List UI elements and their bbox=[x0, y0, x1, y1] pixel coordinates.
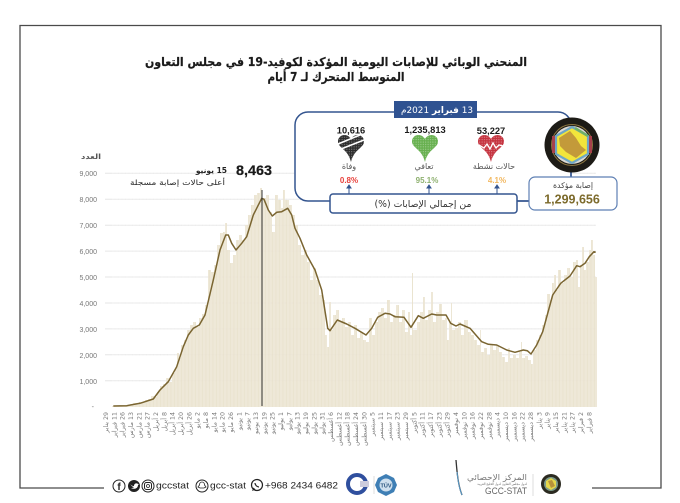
x axis date labels: 27 يناير bbox=[570, 412, 577, 434]
y axis gridlines and labels: 5,000 bbox=[79, 275, 97, 282]
x axis date labels: 10 ديسمبر bbox=[503, 412, 510, 442]
x axis date labels: 7 يونيو bbox=[245, 412, 252, 431]
stat: deaths: 10,616 bbox=[337, 126, 365, 136]
footer: social media contacts: gccstat bbox=[156, 480, 189, 492]
y axis gridlines and labels: 9,000 bbox=[79, 171, 97, 178]
peak marker line bbox=[261, 190, 263, 406]
callout: highest recorded cases: 8,463 bbox=[236, 162, 272, 178]
callout: highest recorded cases: أعلى حالات إصابة مسجلة bbox=[130, 177, 225, 187]
logo: quality certification bbox=[348, 474, 397, 496]
chart: daily cases bars bbox=[112, 170, 597, 407]
icon: small GCC emblem bbox=[541, 474, 561, 494]
footer: social media contacts: +968 2434 6482 bbox=[265, 480, 338, 492]
logo: GCC-STAT: لدول مجلس التعاون لدول الخليج العربية bbox=[477, 482, 527, 486]
x axis date labels: 16 نوفمبر bbox=[470, 412, 477, 440]
x axis date labels: 31 يوليو bbox=[320, 412, 327, 435]
x axis date labels: 11 فبراير bbox=[111, 412, 118, 438]
title: المتوسط المتحرك لـ 7 أيام bbox=[268, 69, 404, 85]
y axis gridlines and labels: 4,000 bbox=[79, 301, 97, 308]
x axis date labels: 1 يوليو bbox=[278, 412, 285, 431]
x axis date labels: 13 يونيو bbox=[253, 412, 260, 435]
x axis date labels: 18 أغسطس bbox=[343, 412, 352, 446]
x axis date labels: 28 نوفمبر bbox=[486, 412, 493, 440]
x axis date labels: 16 ديسمبر bbox=[511, 412, 518, 442]
icon: GCC emblem bbox=[544, 118, 600, 172]
connector bbox=[517, 171, 571, 201]
stat: active: 4.1% bbox=[488, 176, 506, 185]
stat: recovered: تعافي bbox=[414, 162, 434, 171]
icon: twitter bbox=[128, 480, 140, 492]
x axis date labels: 20 أبريل bbox=[176, 412, 185, 436]
x axis date labels: 5 أكتوبر bbox=[409, 412, 418, 434]
x axis date labels: 4 ديسمبر bbox=[495, 412, 502, 438]
stat: recovered bbox=[404, 125, 446, 185]
x axis date labels: 14 مايو bbox=[211, 412, 218, 433]
x axis date labels: 9 يناير bbox=[545, 412, 552, 430]
x axis date labels: 21 مارس bbox=[136, 412, 143, 438]
x axis date labels: 8 أبريل bbox=[159, 412, 168, 432]
x axis date labels: 19 يونيو bbox=[261, 412, 268, 435]
x axis date labels: 25 يونيو bbox=[270, 412, 277, 435]
x axis date labels: 2 مايو bbox=[195, 412, 202, 429]
x axis date labels: 29 سبتمبر bbox=[403, 412, 410, 441]
x axis date labels: 29 أكتوبر bbox=[443, 412, 452, 438]
x axis date labels: 23 سبتمبر bbox=[395, 412, 402, 441]
arrows to percentages bbox=[347, 185, 499, 194]
x axis date labels: 30 أغسطس bbox=[359, 412, 368, 446]
x axis date labels: 5 سبتمبر bbox=[370, 412, 377, 437]
x axis date labels: 11 أكتوبر bbox=[418, 412, 427, 438]
logo: GCC-STAT bbox=[456, 460, 561, 496]
x axis date labels: 20 مايو bbox=[220, 412, 227, 433]
x axis date labels: 2 فبراير bbox=[578, 412, 585, 434]
icon: facebook bbox=[113, 480, 125, 493]
footer: social media contacts bbox=[113, 480, 338, 493]
icon: snapchat bbox=[196, 480, 208, 492]
x axis date labels: 27 مارس bbox=[145, 412, 152, 438]
logo: GCC-STAT: المركز الإحصائي bbox=[467, 473, 527, 483]
stat: deaths: وفاة bbox=[342, 162, 356, 171]
stat: active: حالات نشطة bbox=[473, 162, 515, 171]
y axis gridlines and labels bbox=[79, 153, 596, 411]
y axis gridlines and labels: 1,000 bbox=[79, 379, 97, 386]
x axis date labels: 23 أكتوبر bbox=[434, 412, 443, 438]
x axis date labels: 22 نوفمبر bbox=[478, 412, 485, 440]
x axis date labels: 3 يناير bbox=[536, 412, 543, 430]
logo: quality certification: TÜV bbox=[380, 482, 392, 490]
box: share of total: من إجمالي الإصابات (%) bbox=[375, 199, 471, 210]
x axis date labels: 19 يوليو bbox=[303, 412, 310, 435]
box: confirmed cases bbox=[529, 177, 617, 210]
title bbox=[145, 55, 527, 85]
y axis gridlines and labels: 8,000 bbox=[79, 197, 97, 204]
stat: recovered: 1,235,813 bbox=[404, 125, 446, 135]
x axis date labels: 13 يوليو bbox=[295, 412, 302, 435]
x axis date labels: 8 مايو bbox=[203, 412, 210, 429]
stat: recovered: 95.1% bbox=[416, 176, 438, 185]
icon: whatsapp bbox=[252, 480, 262, 491]
x axis date labels: 17 أكتوبر bbox=[426, 412, 435, 438]
box: share of total bbox=[330, 194, 517, 213]
y axis gridlines and labels: 3,000 bbox=[79, 327, 97, 334]
stat: deaths: 0.8% bbox=[340, 176, 358, 185]
x axis date labels: 15 يناير bbox=[553, 412, 560, 434]
stat: deaths bbox=[337, 126, 365, 185]
icon: facebook: f bbox=[117, 482, 121, 493]
chart: 7-day moving average curve bbox=[113, 198, 596, 406]
x axis date labels: 17 سبتمبر bbox=[386, 412, 393, 441]
x axis date labels: 7 يوليو bbox=[286, 412, 293, 431]
y axis gridlines and labels: 6,000 bbox=[79, 249, 97, 256]
date badge: 13 فبراير 2021م bbox=[401, 106, 473, 116]
callout: highest recorded cases bbox=[130, 162, 272, 187]
title: المنحني الوبائي للإصابات اليومية المؤكدة لكوفيد-19 في مجلس التعاون bbox=[145, 55, 527, 70]
y axis gridlines and labels: 7,000 bbox=[79, 223, 97, 230]
x axis date labels: 25 يوليو bbox=[311, 412, 318, 435]
x axis date labels: 24 أغسطس bbox=[351, 412, 360, 446]
x axis date labels: 1 يونيو bbox=[236, 412, 243, 431]
x axis date labels: 22 ديسمبر bbox=[520, 412, 527, 442]
y axis gridlines and labels: 2,000 bbox=[79, 353, 97, 360]
logo: GCC-STAT: GCC-STAT bbox=[485, 486, 527, 496]
panel: summary figures bbox=[295, 101, 617, 213]
x axis date labels: 26 مايو bbox=[228, 412, 235, 433]
date badge bbox=[394, 101, 477, 118]
x axis date labels: 21 يناير bbox=[561, 412, 568, 434]
x axis date labels: 26 فبراير bbox=[120, 412, 127, 438]
y axis gridlines and labels: - bbox=[92, 404, 95, 411]
x axis date labels: 4 نوفمبر bbox=[453, 412, 460, 436]
x axis date labels: 11 سبتمبر bbox=[378, 412, 385, 441]
box: confirmed cases: 1,299,656 bbox=[544, 192, 600, 206]
x axis date labels bbox=[103, 412, 593, 446]
x axis date labels: 10 نوفمبر bbox=[461, 412, 468, 440]
footer: social media contacts: gcc-stat bbox=[210, 480, 246, 492]
x axis date labels: 28 ديسمبر bbox=[528, 412, 535, 442]
icon: instagram bbox=[142, 480, 154, 492]
x axis date labels: 12 أغسطس bbox=[334, 412, 343, 446]
x axis date labels: 2 أبريل bbox=[151, 412, 160, 432]
x axis date labels: 13 مارس bbox=[128, 412, 135, 438]
stat: active: 53,227 bbox=[477, 126, 505, 136]
x axis date labels: 29 يناير bbox=[103, 412, 110, 434]
y axis gridlines and labels: العدد bbox=[81, 153, 101, 161]
panel outline bbox=[295, 112, 571, 201]
x axis date labels: 6 أغسطس bbox=[326, 412, 335, 442]
x axis date labels: 14 أبريل bbox=[168, 412, 177, 436]
callout: highest recorded cases: 15 يونيو bbox=[195, 166, 227, 175]
x axis date labels: 26 أبريل bbox=[184, 412, 193, 436]
box: confirmed cases: إصابة مؤكدة bbox=[553, 181, 593, 190]
stat: active bbox=[473, 126, 515, 185]
x axis date labels: 8 فبراير bbox=[586, 412, 593, 434]
